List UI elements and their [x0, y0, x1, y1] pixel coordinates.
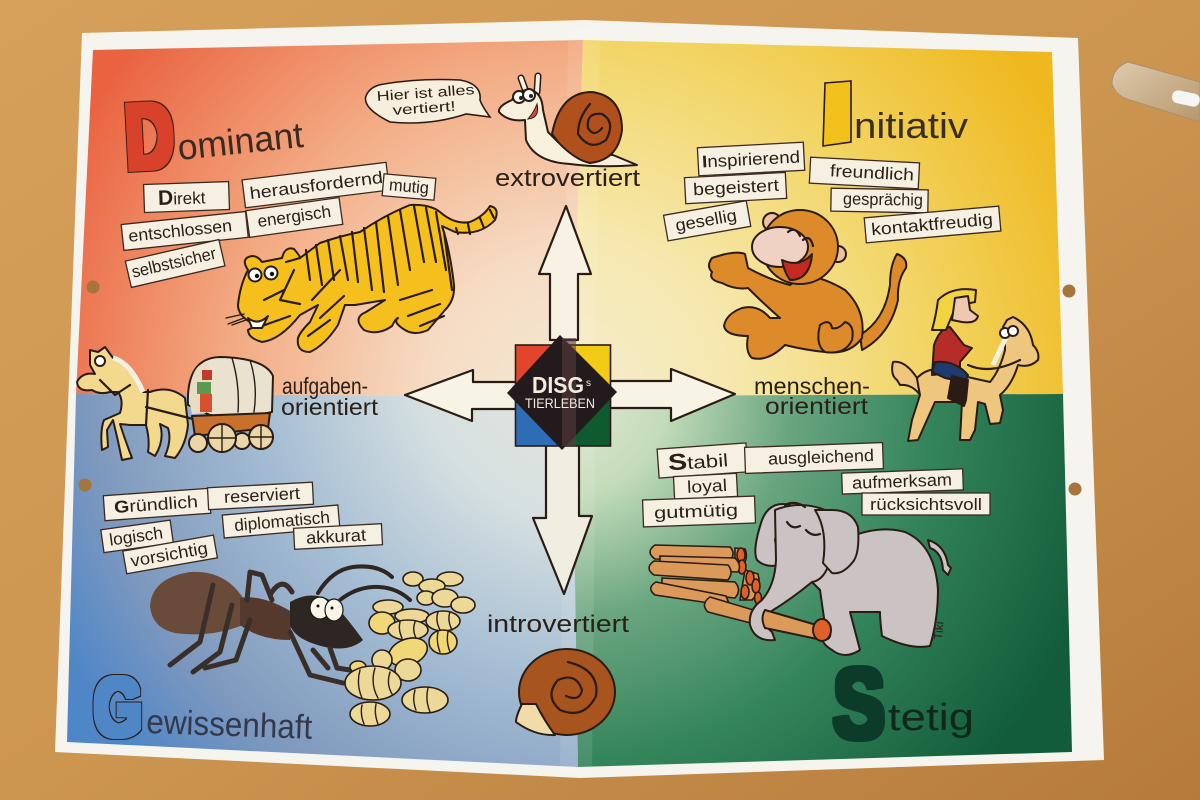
- icon: horse and wagon: [77, 347, 273, 460]
- speech bubble: [366, 80, 490, 123]
- heading: Dominant: D: [123, 85, 176, 189]
- heading: Dominant: ominant: [176, 114, 305, 168]
- label: Stabil: [657, 443, 748, 478]
- centre logo: DISGs Tierleben: TIERLEBEN: [525, 395, 595, 411]
- heading: Gewissenhaft: [94, 662, 313, 753]
- label: energisch: energisch: [256, 202, 332, 231]
- label: Gründlich: Gründlich: [113, 492, 199, 517]
- labels: initiativ traits: [664, 142, 1001, 243]
- icon: logs: [649, 545, 770, 628]
- label: begeistert: [684, 172, 787, 204]
- label: selbstsicher: selbstsicher: [130, 244, 218, 282]
- panel: dominant quadrant: [76, 40, 583, 396]
- axis label: menschen-orientiert: orientiert: [765, 393, 869, 419]
- label: gesellig: [664, 201, 751, 241]
- heading: Initiativ: [823, 81, 968, 146]
- arrow: menschenorientiert right: [610, 369, 735, 421]
- label: kontaktfreudig: [864, 206, 1001, 243]
- axis label: aufgaben-orientiert: aufgaben-: [282, 373, 368, 399]
- label: Stabil: Stabil: [667, 445, 729, 475]
- label: rücksichtsvoll: [862, 493, 990, 515]
- icon: ant eggs: [345, 572, 475, 726]
- punch holes: [78, 280, 1082, 496]
- panel: initiativ quadrant: [572, 40, 1063, 396]
- icon: ant: [150, 566, 410, 683]
- label: Inspirierend: [697, 142, 805, 176]
- arrow: introvertiert down: [533, 445, 592, 594]
- label: Direkt: [144, 182, 229, 212]
- label: energisch: [246, 198, 343, 237]
- label: akkurat: akkurat: [306, 526, 367, 548]
- axis label: aufgaben-orientiert: orientiert: [281, 394, 379, 420]
- label: Inspirierend: Inspirierend: [702, 147, 801, 172]
- signature: Tiki: [931, 621, 947, 640]
- icon: rider on horse: [892, 289, 1038, 441]
- label: freundlich: freundlich: [830, 161, 914, 185]
- heading: Initiativ: nitiativ: [854, 105, 968, 146]
- axis label: menschen-orientiert: menschen-: [754, 373, 870, 399]
- label: ausgleichend: [745, 443, 883, 473]
- icon: snail extrovert: [499, 76, 637, 166]
- label: entschlossen: entschlossen: [127, 216, 233, 246]
- label: herausfordernd: herausfordernd: [249, 168, 384, 203]
- icon: monkey: [709, 210, 906, 359]
- label: ausgleichend: ausgleichend: [768, 446, 874, 469]
- label: diplomatisch: [222, 505, 340, 538]
- label: reserviert: reserviert: [224, 484, 301, 507]
- arrow: aufgabenorientiert left: [405, 370, 516, 421]
- label: gutmütig: gutmütig: [654, 501, 738, 523]
- heading: Stetig: tetig: [888, 697, 974, 739]
- centre logo: DISGs Tierleben: DISG: [532, 372, 584, 398]
- pen on table: [1112, 62, 1200, 122]
- label: gesellig: gesellig: [674, 206, 738, 235]
- label: gutmütig: [643, 496, 755, 527]
- label: Gründlich: [103, 488, 211, 521]
- speech bubble: Hier ist alles: [376, 81, 475, 104]
- label: entschlossen: [121, 211, 248, 250]
- label: rücksichtsvoll: rücksichtsvoll: [870, 495, 982, 514]
- label: freundlich: [809, 157, 920, 189]
- axis label: extrovertiert: extrovertiert: [495, 165, 640, 192]
- label: mutig: mutig: [388, 175, 430, 198]
- centre logo: DISGs Tierleben: s: [586, 378, 591, 389]
- label: Direkt: Direkt: [158, 185, 206, 210]
- panel: stetig quadrant: [572, 394, 1072, 767]
- label: logisch: logisch: [108, 523, 164, 550]
- labels: dominant traits: [121, 162, 436, 287]
- label: diplomatisch: diplomatisch: [233, 508, 331, 535]
- heading: Gewissenhaft: G: [94, 662, 142, 753]
- arrow: extrovertiert up: [539, 206, 591, 340]
- label: mutig: [382, 174, 436, 200]
- label: reserviert: [207, 482, 314, 510]
- label: aufmerksam: aufmerksam: [852, 470, 952, 493]
- axis label: introvertiert: introvertiert: [487, 611, 629, 638]
- label: herausfordernd: [242, 162, 389, 208]
- axis label: menschen-orientiert: [754, 373, 870, 419]
- heading: Stetig: [833, 648, 974, 760]
- heading: Gewissenhaft: ewissenhaft: [146, 703, 313, 747]
- label: akkurat: [294, 524, 383, 549]
- speech bubble: vertiert!: [392, 98, 456, 118]
- label: gesprächig: gesprächig: [843, 189, 923, 210]
- label: loyal: [673, 473, 738, 500]
- labels: gewissenhaft traits: [101, 482, 383, 574]
- axis arrows: [405, 206, 735, 594]
- heading: Stetig: S: [833, 648, 885, 760]
- icon: snail introvert: [516, 649, 615, 735]
- centre fold: [560, 24, 600, 776]
- heading: Dominant: [123, 85, 305, 189]
- label: vorsichtig: vorsichtig: [129, 539, 209, 571]
- icon: elephant: [750, 503, 951, 655]
- icon: tiger: [226, 205, 497, 352]
- label: aufmerksam: [842, 469, 963, 494]
- label: begeistert: begeistert: [693, 176, 780, 199]
- label: logisch: [101, 520, 173, 553]
- label: kontaktfreudig: kontaktfreudig: [870, 210, 994, 239]
- labels: stetig traits: [643, 443, 990, 527]
- axis label: aufgaben-orientiert: [281, 373, 379, 420]
- label: vorsichtig: [123, 535, 217, 574]
- label: loyal: loyal: [687, 476, 727, 497]
- panel: gewissenhaft quadrant: [67, 394, 578, 767]
- centre logo: DISGs Tierleben: [507, 335, 617, 450]
